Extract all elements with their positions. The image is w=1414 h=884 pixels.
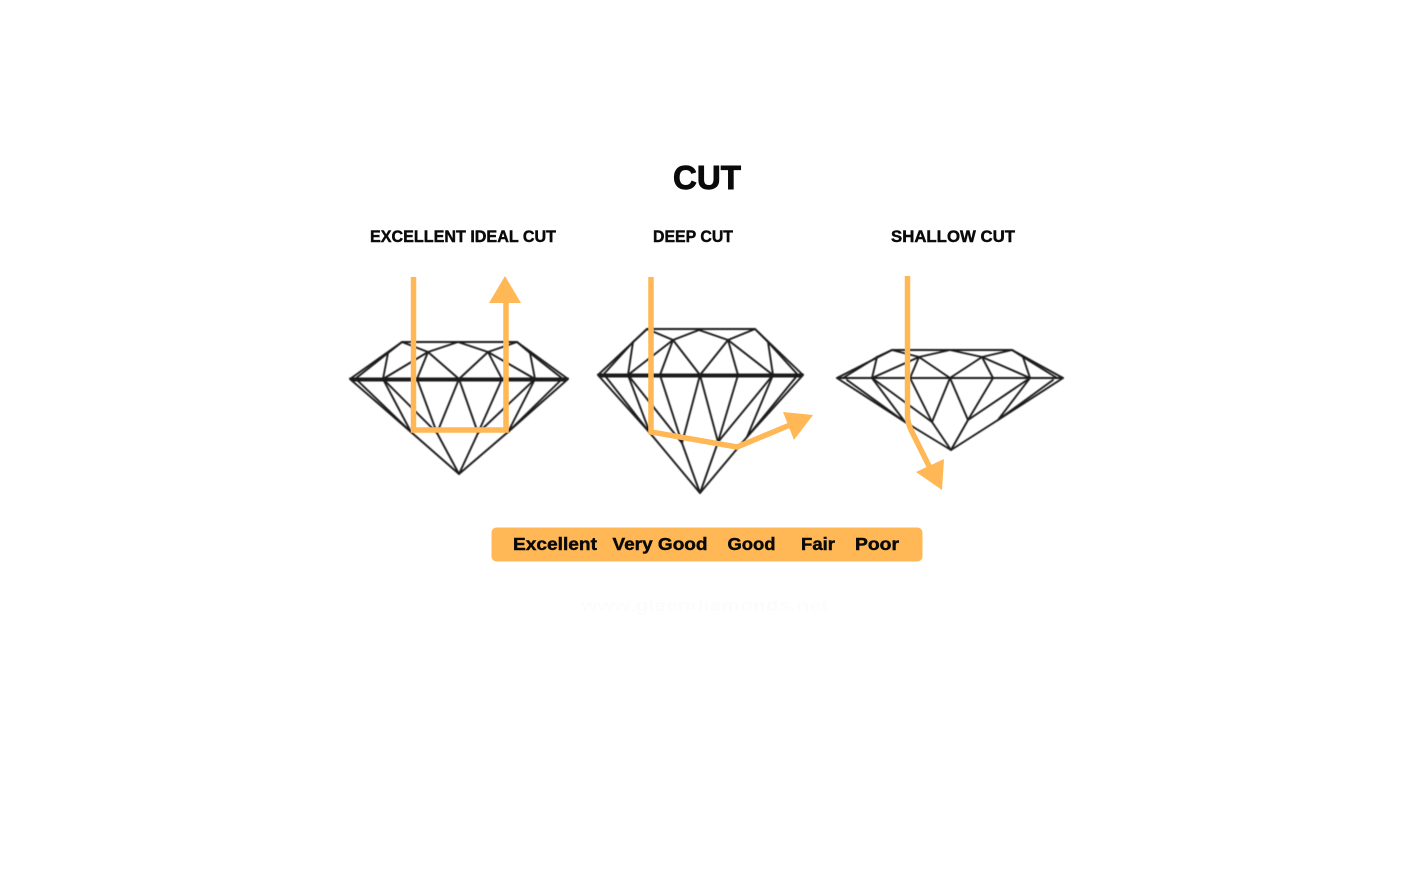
rating scale bar: Poor bbox=[855, 534, 899, 554]
rating scale bar: Very Good bbox=[612, 534, 708, 554]
arrow: ideal cut light path bbox=[414, 276, 521, 430]
diamond: shallow cut bbox=[837, 350, 1063, 450]
diamond: excellent ideal cut bbox=[350, 342, 568, 474]
faint watermark: www.gleendiamonds.net bbox=[580, 596, 828, 615]
arrow: shallow cut light path bbox=[908, 276, 944, 490]
rating scale bar: Excellent bbox=[513, 534, 597, 554]
heading: excellent ideal cut: EXCELLENT IDEAL CUT bbox=[370, 228, 556, 246]
title: CUT bbox=[673, 159, 741, 196]
rating scale bar: Good bbox=[728, 534, 776, 554]
heading: shallow cut: SHALLOW CUT bbox=[891, 228, 1015, 246]
heading: deep cut: DEEP CUT bbox=[653, 228, 733, 246]
diamond: deep cut bbox=[598, 329, 803, 493]
rating scale bar bbox=[492, 528, 922, 562]
rating scale bar: Fair bbox=[801, 534, 835, 554]
arrow: deep cut light path bbox=[651, 277, 813, 447]
